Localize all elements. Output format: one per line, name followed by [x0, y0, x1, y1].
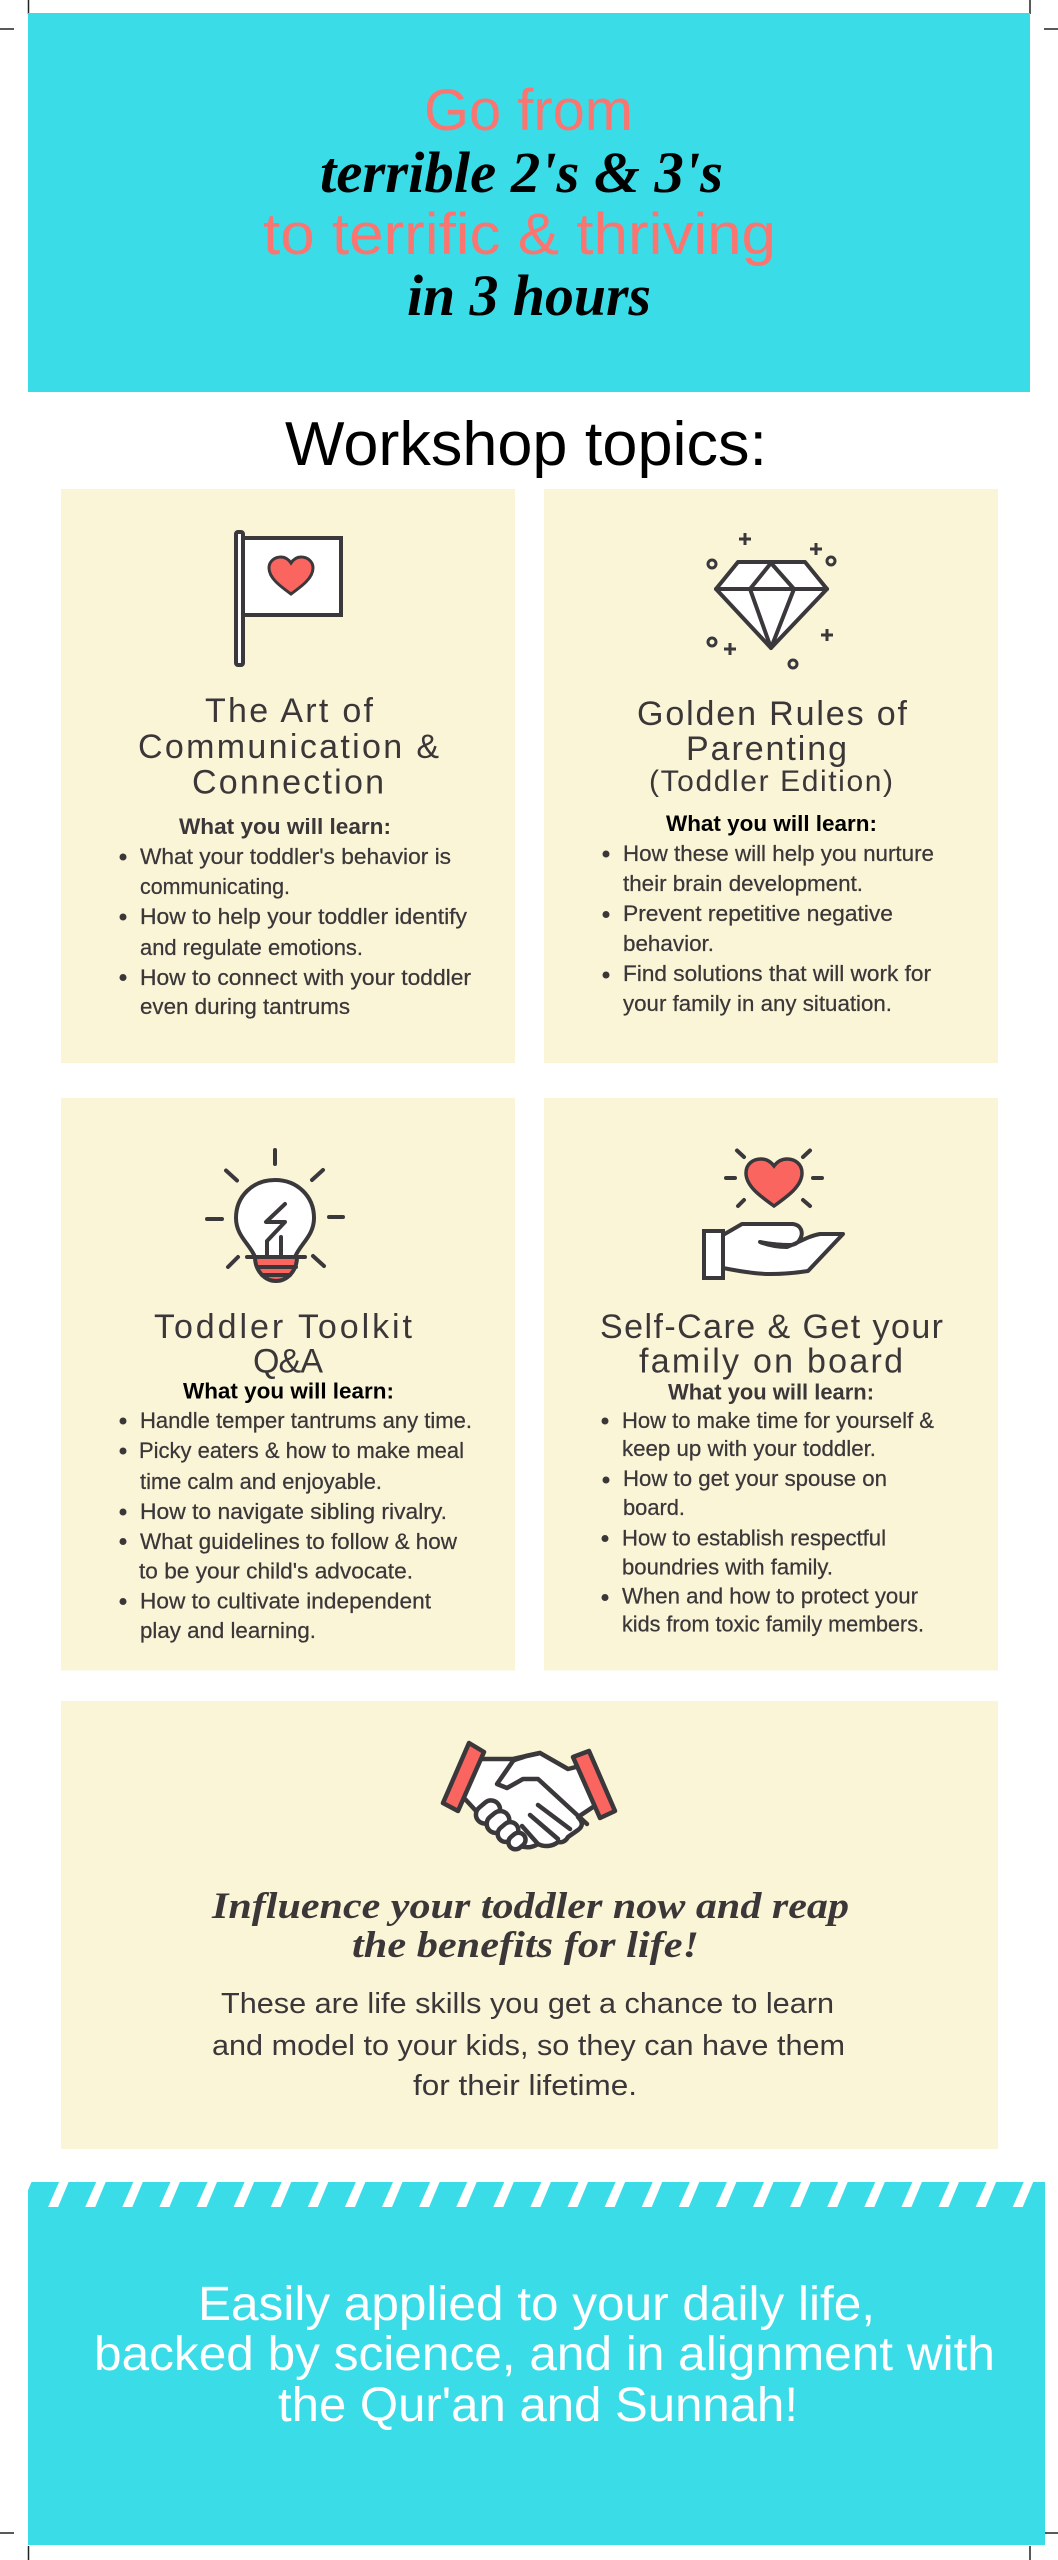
closing message: the Qur'an and Sunnah!	[278, 2379, 798, 2432]
bullet list: Find solutions that will work for	[623, 961, 931, 986]
heading: Toddler Toolkit	[154, 1308, 413, 1346]
paragraph: for their lifetime.	[413, 2070, 637, 2102]
bullet list: What guidelines to follow & how	[140, 1529, 457, 1554]
icon: handshake	[443, 1743, 615, 1852]
subheading: what you will learn: What you will learn:	[666, 811, 877, 836]
panel: toddler toolkit q&a	[61, 1098, 515, 1670]
panel: golden rules of parenting	[544, 489, 998, 1063]
paragraph	[212, 1988, 845, 2102]
heading: Self-Care & Get your	[600, 1308, 943, 1346]
footer banner	[11, 2182, 1045, 2545]
bullet list: your family in any situation.	[623, 991, 892, 1016]
bullet list: communicating.	[140, 874, 290, 899]
bullet list: How to navigate sibling rivalry.	[140, 1499, 447, 1524]
panel: self-care and family on board	[544, 1098, 998, 1670]
subheading: what you will learn: What you will learn:	[183, 1378, 394, 1404]
bullet list: Prevent repetitive negative	[623, 901, 893, 926]
heading: Golden Rules of	[637, 695, 908, 733]
paragraph: These are life skills you get a chance to learn	[221, 1988, 834, 2020]
bullet list: boundries with family.	[622, 1554, 833, 1580]
bullet list: When and how to protect your	[622, 1584, 918, 1608]
bullet list: board.	[623, 1495, 685, 1520]
heading: Q&A	[253, 1342, 323, 1380]
closing message	[94, 2278, 995, 2432]
closing message: backed by science, and in alignment with	[94, 2328, 995, 2381]
bullet list: to be your child's advocate.	[139, 1558, 413, 1584]
heading: The Art of	[205, 692, 374, 730]
bullet list: Picky eaters & how to make meal	[139, 1438, 464, 1463]
heading: Connection	[192, 764, 384, 802]
icon: light bulb	[207, 1150, 343, 1281]
heading	[637, 695, 908, 798]
bullet list	[602, 1408, 934, 1636]
header banner	[28, 13, 1030, 392]
bullet list: their brain development.	[623, 871, 863, 896]
bullet list	[602, 841, 934, 1016]
heading	[600, 1308, 943, 1380]
icon: flag with heart	[236, 532, 341, 665]
bullet list: How to establish respectful	[622, 1526, 886, 1550]
bullet list: How to cultivate independent	[140, 1588, 431, 1614]
heading	[154, 1308, 413, 1380]
bullet list: kids from toxic family members.	[622, 1612, 924, 1636]
bullet list: How to help your toddler identify	[140, 904, 467, 929]
bullet list: behavior.	[623, 931, 714, 956]
bullet list: play and learning.	[140, 1618, 316, 1643]
headline: to terrific & thriving: to terrific & thriving	[263, 202, 776, 267]
bullet list: What your toddler's behavior is	[140, 844, 451, 869]
bullet list: even during tantrums	[140, 994, 350, 1019]
headline: terrible 2's & 3's: terrible 2's & 3's	[320, 140, 723, 205]
bullet list: time calm and enjoyable.	[140, 1469, 382, 1494]
subheading: what you will learn: What you will learn:	[668, 1380, 874, 1404]
closing message: Easily applied to your daily life,	[198, 2278, 875, 2331]
bullet list: How to connect with your toddler	[140, 965, 471, 990]
headline: go from: Go from	[424, 78, 633, 143]
bullet list	[120, 844, 471, 1019]
icon: hand holding heart	[704, 1150, 843, 1278]
headline: in 3 hours: in 3 hours	[407, 263, 651, 328]
heading: family on board	[639, 1342, 903, 1380]
script heading	[211, 1886, 849, 1966]
script heading: Influence your toddler now and reap	[211, 1886, 849, 1927]
heading: Communication &	[138, 728, 439, 766]
heading	[138, 692, 439, 802]
heading: Parenting	[686, 730, 847, 768]
icon: diamond with sparkles	[708, 533, 835, 668]
bullet list: and regulate emotions.	[140, 935, 363, 960]
bullet list: Handle temper tantrums any time.	[140, 1408, 472, 1433]
bullet list: keep up with your toddler.	[622, 1436, 876, 1461]
section heading: workshop topics: Workshop topics:	[285, 410, 767, 479]
bullet list: How to make time for yourself &	[622, 1408, 934, 1433]
heading: (Toddler Edition)	[649, 765, 893, 798]
panel: influence your toddler	[61, 1701, 998, 2149]
subheading: what you will learn: What you will learn:	[179, 814, 391, 839]
bullet list: How these will help you nurture	[623, 841, 934, 866]
paragraph: and model to your kids, so they can have them	[212, 2030, 845, 2062]
striped top edge	[11, 2182, 1033, 2207]
bullet list: How to get your spouse on	[623, 1466, 887, 1491]
bullet list	[120, 1408, 472, 1643]
script heading: the benefits for life!	[352, 1925, 699, 1966]
panel: the art of communication and connection	[61, 489, 515, 1063]
